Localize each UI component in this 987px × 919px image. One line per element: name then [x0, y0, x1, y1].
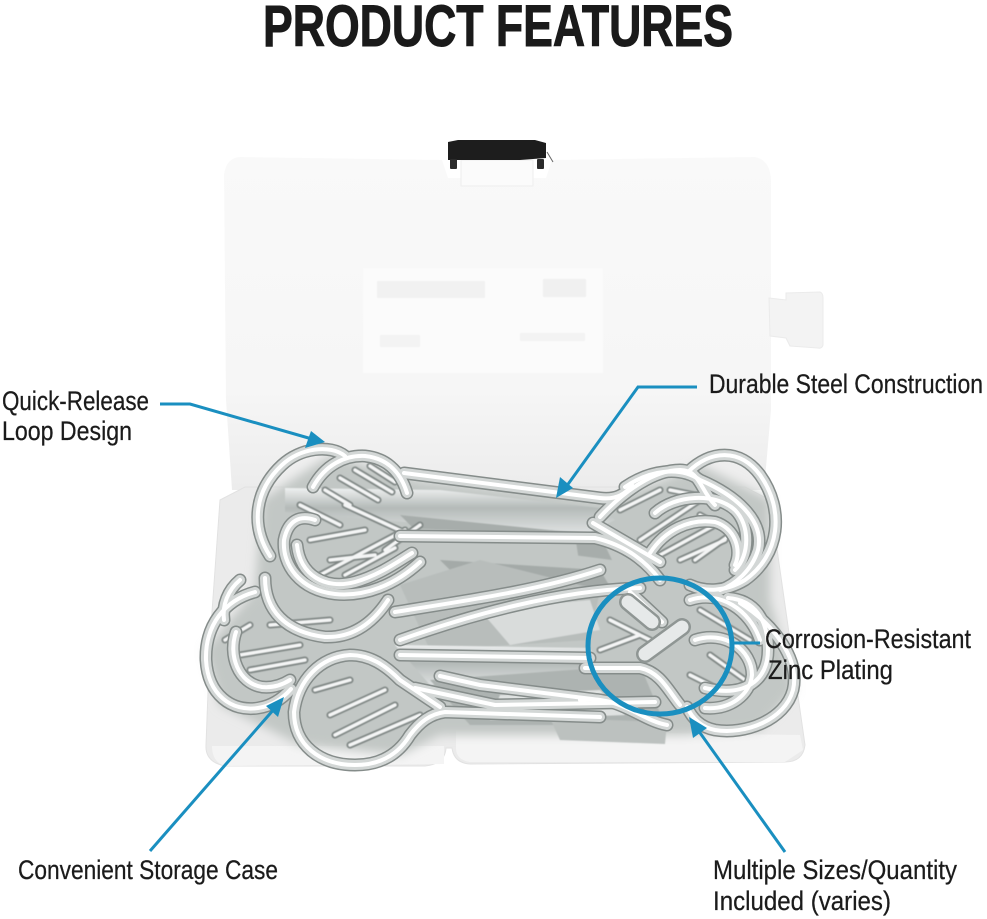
arrow: durable steel — [556, 387, 697, 498]
case label sticker — [363, 268, 603, 373]
wires: body — [206, 449, 794, 765]
wires: dark edge — [206, 449, 794, 765]
highlight circle and leader — [588, 578, 760, 714]
arrow: quick-release — [160, 404, 325, 448]
case side latch — [769, 292, 823, 348]
callout: zinc plating — [588, 578, 971, 714]
reflection highlights — [225, 466, 760, 745]
case lid — [224, 157, 771, 490]
callout: quick-release loop — [2, 386, 325, 448]
reflections inside rings — [225, 466, 760, 745]
wires: highlight — [206, 449, 794, 765]
callout: durable steel — [556, 369, 983, 498]
arrow: storage case — [150, 697, 284, 851]
callout: storage case — [18, 697, 284, 885]
label: storage case: Convenient Storage Case — [18, 855, 278, 885]
label: quick-release: Quick-Release — [2, 386, 149, 416]
label: quick-release: Loop Design — [2, 416, 132, 446]
arrow: sizes — [689, 717, 785, 852]
label: sizes: Multiple Sizes/Quantity — [713, 855, 957, 885]
panel: plastic case — [206, 140, 823, 766]
callout: sizes and quantity — [689, 717, 957, 916]
case tray — [206, 487, 805, 766]
label: sizes: Included (varies) — [713, 886, 891, 916]
center thick bars — [628, 602, 682, 654]
metal shadow base — [205, 455, 795, 755]
black hinge clip — [448, 140, 553, 186]
center thick bars highlight — [628, 602, 682, 654]
label: zinc plating: Zinc Plating — [768, 655, 893, 685]
flat steel shanks — [285, 488, 667, 744]
tray bottom lip — [212, 730, 803, 766]
hooks: zinc plated steel — [205, 449, 795, 765]
